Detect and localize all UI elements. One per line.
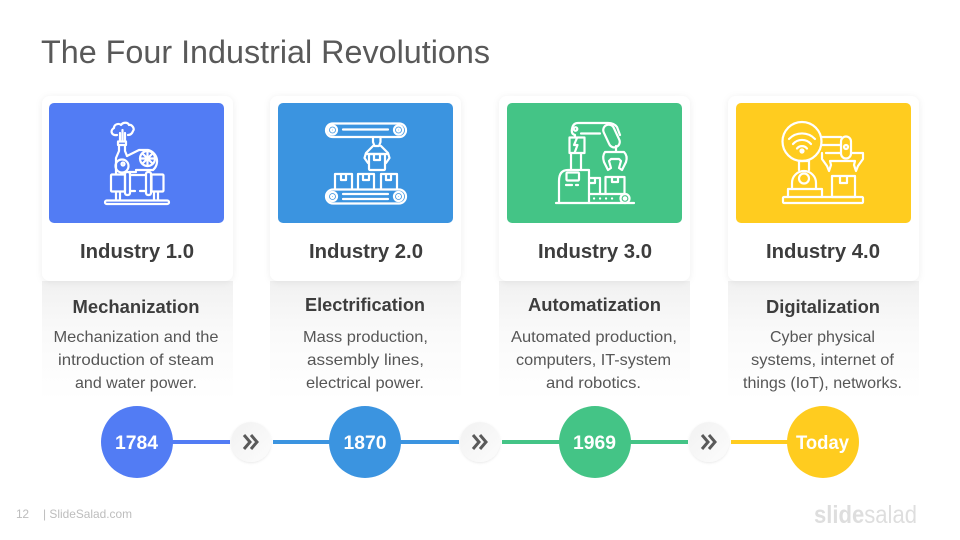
subheading: Mechanization (72, 297, 200, 317)
title: The Four Industrial Revolutions (41, 34, 490, 70)
description: Automated production, (511, 329, 677, 346)
description: and water power. (75, 375, 197, 392)
card heading: Industry 4.0 (766, 241, 880, 263)
card heading: Industry 3.0 (538, 241, 652, 263)
milestone: Today (787, 406, 859, 478)
description (511, 329, 677, 392)
description: Mass production, (303, 329, 428, 346)
card heading: Industry 1.0 (80, 241, 194, 263)
description: introduction of steam (58, 352, 214, 369)
description: Cyber physical (770, 329, 875, 346)
description: computers, IT-system (516, 352, 671, 369)
icon: robotic arm (556, 123, 634, 203)
milestone: Today: Today (796, 433, 849, 454)
arrow: 1784 to 1870 (231, 422, 271, 462)
description: Mechanization and the (54, 329, 219, 346)
description (303, 329, 428, 392)
arrow: 1870 to 1969 (460, 422, 500, 462)
panel: Industry 1.0 (42, 96, 233, 401)
arrow: 1969 to Today (689, 422, 729, 462)
description: assembly lines, (307, 352, 424, 369)
description: things (IoT), networks. (743, 375, 902, 392)
milestone: 1969: 1969 (573, 433, 616, 454)
subheading: Automatization (528, 295, 661, 315)
timeline (101, 406, 859, 478)
subheading: Electrification (305, 295, 425, 315)
milestone: 1784 (101, 406, 173, 478)
description: electrical power. (306, 375, 424, 392)
panel: Industry 4.0 (728, 96, 919, 401)
footer source: | SlideSalad.com (43, 507, 132, 521)
milestone: 1870: 1870 (344, 433, 386, 454)
milestone: 1870 (329, 406, 401, 478)
subheading: Digitalization (766, 297, 880, 317)
panel: Industry 3.0 (499, 96, 690, 401)
card heading: Industry 2.0 (309, 241, 423, 263)
icon: smart robot with wifi (782, 122, 863, 203)
icon: assembly conveyor (326, 124, 406, 204)
icon: steam engine (105, 123, 169, 204)
description: systems, internet of (751, 352, 895, 369)
description (54, 329, 219, 392)
milestone: 1969 (559, 406, 631, 478)
milestone: 1784: 1784 (115, 433, 158, 454)
description: and robotics. (546, 375, 641, 392)
logo: slidesalad (814, 501, 917, 529)
description (743, 329, 902, 392)
panel: Industry 2.0 (270, 96, 461, 401)
page number: 12 (16, 507, 29, 521)
